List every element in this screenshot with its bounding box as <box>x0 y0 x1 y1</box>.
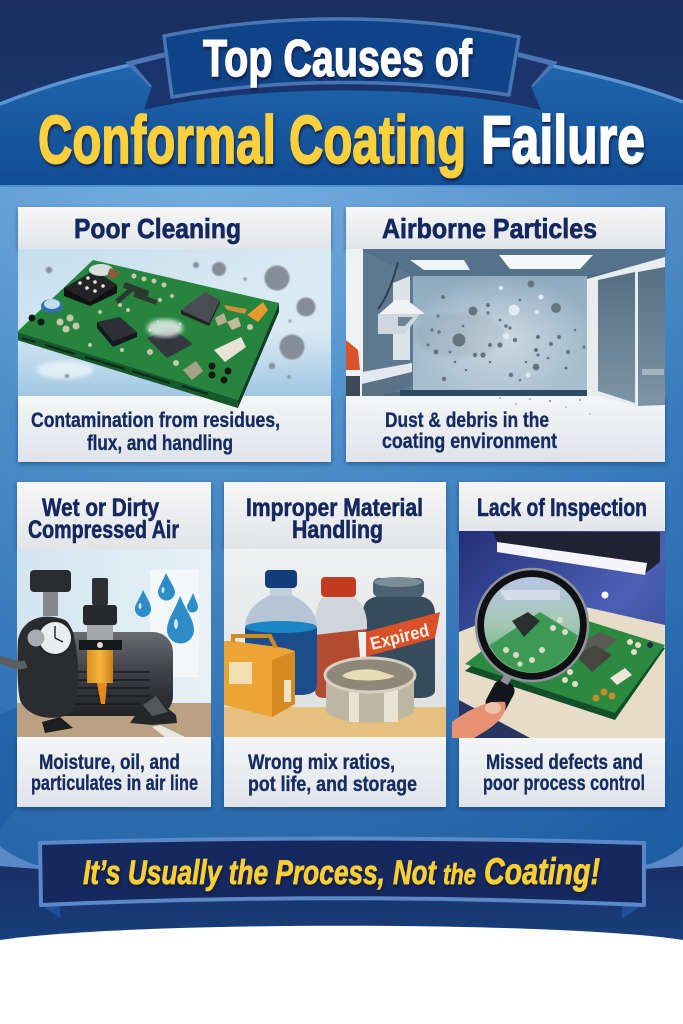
pressure gauge <box>70 627 74 637</box>
card description: Wrong mix ratios, <box>248 751 395 774</box>
blue bottle <box>245 570 317 695</box>
white residue <box>147 319 183 337</box>
title line 2: Conformal Coating <box>38 102 466 178</box>
footer slogan: Coating! <box>484 851 600 892</box>
divider band <box>0 185 683 187</box>
panel: poor cleaning <box>17 207 331 462</box>
card header <box>224 482 446 549</box>
air hose <box>0 660 26 665</box>
card description: coating environment <box>382 430 557 453</box>
illustration: contaminated circuit board <box>17 249 331 408</box>
card title: Wet or Dirty <box>42 494 159 522</box>
dust cloud <box>415 313 505 357</box>
footer band <box>0 838 683 1024</box>
filter assembly <box>92 578 108 605</box>
white area below the footer <box>0 926 683 1024</box>
panel: lack of inspection <box>452 482 665 807</box>
footer slogan: It’s Usually the Process, <box>83 854 385 892</box>
illustration: magnifier over circuit board <box>452 531 665 738</box>
ribbon tails <box>42 906 641 919</box>
cleanroom window frame <box>587 257 665 406</box>
card title: Compressed Air <box>28 516 179 544</box>
illustration: air compressor with water drops <box>0 549 211 737</box>
card description: particulates in air line <box>31 772 198 795</box>
arch highlight line <box>0 65 683 104</box>
board <box>465 648 665 720</box>
expired label <box>358 612 440 657</box>
footer banner <box>40 838 644 905</box>
footer swoosh right <box>643 846 683 869</box>
hand <box>452 702 506 738</box>
illustration: cleanroom with dust <box>346 249 665 415</box>
card caption background <box>459 738 665 807</box>
dark jar <box>363 577 435 698</box>
ribbon tails <box>125 52 558 110</box>
card title: Poor Cleaning <box>74 213 241 244</box>
card description <box>248 751 417 796</box>
footer slogan: Not <box>393 854 437 892</box>
panel: improper material handling <box>224 482 446 807</box>
card description <box>483 751 645 795</box>
card description: flux, and handling <box>87 432 233 455</box>
card header <box>18 207 331 249</box>
footer swoosh left <box>0 846 40 869</box>
vent foot <box>130 694 177 725</box>
dust particles <box>46 262 316 379</box>
card description: Missed defects and <box>486 751 643 774</box>
card caption background <box>346 396 665 462</box>
expired label: Expired <box>368 620 431 654</box>
red bottle <box>315 577 367 698</box>
illustration: bottles, box and expired label <box>224 549 446 737</box>
metal pot <box>325 658 415 722</box>
card description: Dust & debris in the <box>385 409 549 432</box>
card header <box>346 207 665 249</box>
card caption background <box>224 737 446 807</box>
card description: Contamination from residues, <box>31 409 280 432</box>
card description <box>382 409 557 453</box>
card description <box>31 409 280 455</box>
highlight dot <box>602 592 608 598</box>
knob <box>43 592 58 616</box>
compressor body <box>64 632 173 716</box>
ceiling lights <box>410 260 470 270</box>
panel: wet or dirty compressed air <box>0 482 211 807</box>
card title: Handling <box>292 516 383 544</box>
header: arch and title <box>0 0 683 187</box>
card caption background <box>18 396 331 462</box>
footer slogan: the <box>443 859 476 891</box>
falling specks <box>499 397 591 415</box>
components <box>64 272 117 302</box>
cardboard box <box>224 636 295 717</box>
header dark background <box>0 0 683 186</box>
panel: airborne particles <box>346 207 665 462</box>
title line 1: Top Causes of <box>203 30 473 88</box>
magnifying glass <box>476 569 588 717</box>
card caption background <box>17 737 211 807</box>
card description: Moisture, oil, and <box>39 751 180 774</box>
card header <box>17 482 211 549</box>
work surface <box>459 600 665 738</box>
card description: pot life, and storage <box>248 773 417 796</box>
card description <box>31 751 198 795</box>
card title <box>246 494 423 544</box>
card title <box>28 494 179 544</box>
card title: Airborne Particles <box>382 213 597 244</box>
inspection lamp <box>493 532 660 575</box>
board <box>17 303 279 408</box>
card header <box>459 482 665 531</box>
top ribbon banner <box>164 19 519 97</box>
header arch <box>0 65 683 186</box>
card title: Improper Material <box>246 494 423 522</box>
footer dark base <box>0 866 683 941</box>
water drops <box>135 573 198 644</box>
hood machine <box>393 276 410 360</box>
